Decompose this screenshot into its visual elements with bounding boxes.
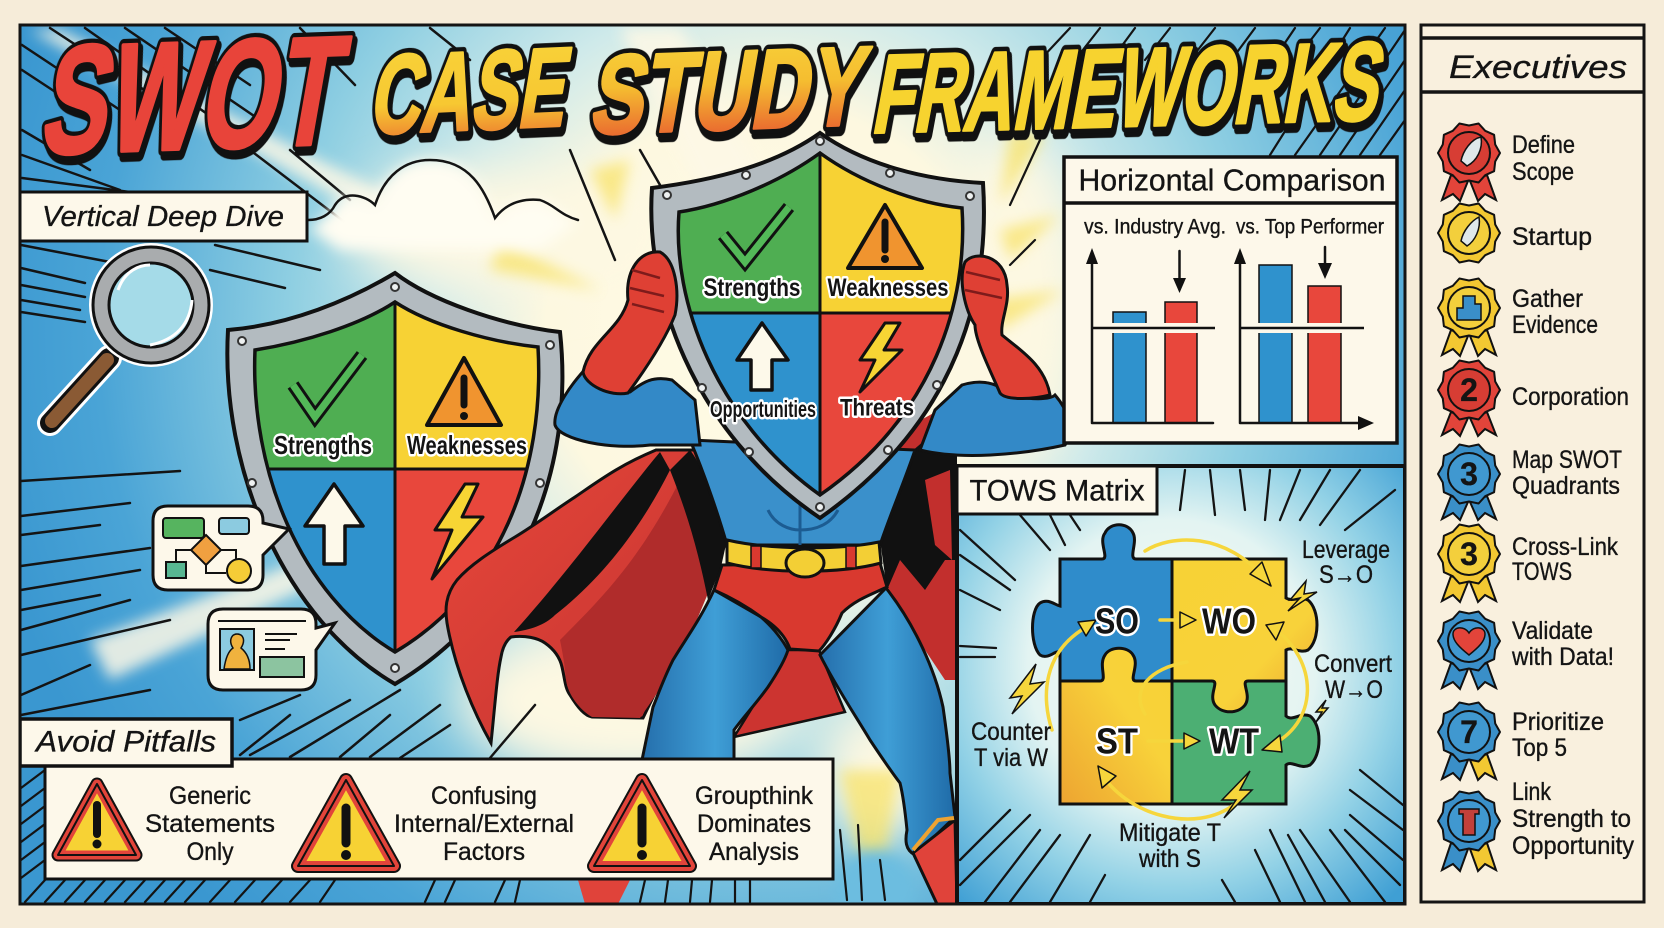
step: Define Scope xyxy=(1438,124,1575,201)
small SWOT shield xyxy=(227,273,562,684)
label: Leverage S to O: Leverage xyxy=(1302,536,1390,564)
light beams xyxy=(30,28,760,680)
step: Map SWOT Quadrants xyxy=(1438,444,1622,520)
cloud xyxy=(308,160,578,250)
label: Convert W to O xyxy=(1314,650,1392,704)
label: vs. Top Performer: vs. Top Performer xyxy=(1236,216,1384,238)
text: groupthink: Analysis xyxy=(709,838,799,866)
step: Prioritize Top 5 xyxy=(1438,702,1604,780)
icon: warning triangle xyxy=(848,205,922,268)
speech bubble: profile card xyxy=(208,609,335,690)
text: generic statements: Generic xyxy=(169,782,251,810)
trunks xyxy=(714,563,887,651)
text: confusing factors xyxy=(394,782,574,866)
left leg xyxy=(642,590,788,760)
sidebar: executive steps xyxy=(1421,25,1644,902)
step: Cross-Link TOWS: Cross-Link xyxy=(1512,533,1618,561)
quadrant labels: SO xyxy=(1095,600,1139,642)
TOWS speed lines xyxy=(960,470,1403,902)
step: Validate with Data: with Data! xyxy=(1511,643,1614,671)
puzzle: WT piece xyxy=(1172,681,1319,804)
main panel border xyxy=(20,25,1405,904)
panel: horizontal comparison xyxy=(1064,157,1397,443)
heading: Vertical Deep Dive: Vertical Deep Dive xyxy=(42,201,284,233)
label: Mitigate T with S: Mitigate T xyxy=(1119,819,1221,847)
puzzle: SO piece xyxy=(1032,525,1172,681)
step: Cross-Link TOWS: TOWS xyxy=(1512,558,1572,586)
title word: FRAMEWORKS xyxy=(866,17,1395,157)
step: Gather Evidence xyxy=(1438,278,1598,356)
text: confusing factors: Factors xyxy=(443,838,525,866)
label: Mitigate T with S xyxy=(1119,819,1221,873)
arrowheads xyxy=(1078,562,1284,788)
step: Prioritize Top 5: 7 xyxy=(1460,714,1478,750)
title xyxy=(32,3,1395,187)
heading: Vertical Deep Dive xyxy=(20,192,307,241)
puzzle: ST piece xyxy=(1060,648,1172,804)
step: Map SWOT Quadrants: 3 xyxy=(1460,456,1478,492)
label: vs. Industry Avg.: vs. Industry Avg. xyxy=(1084,216,1226,238)
bar chart: top performer xyxy=(1234,247,1374,430)
heading: Horizontal Comparison: Horizontal Comparison xyxy=(1078,162,1386,198)
icon: warning triangle xyxy=(427,358,501,425)
label: Strengths: Strengths xyxy=(274,430,372,460)
label: Counter T via W: T via W xyxy=(974,744,1048,772)
title word: SWOT xyxy=(32,3,359,187)
label: Leverage S to O xyxy=(1302,536,1390,589)
icon: up arrow xyxy=(737,323,788,390)
blue ground below hero xyxy=(840,840,908,884)
text: groupthink: Groupthink xyxy=(695,782,813,810)
title word: CASE: CASE xyxy=(364,23,580,158)
step: Map SWOT Quadrants: Map SWOT xyxy=(1512,446,1622,474)
title word: CASE: CASE xyxy=(364,23,580,158)
quadrant labels: WT xyxy=(1209,720,1259,762)
speed lines xyxy=(21,28,660,758)
text: groupthink xyxy=(695,782,813,866)
speech bubble: flowchart xyxy=(153,506,289,590)
left cape xyxy=(446,450,727,743)
right cape xyxy=(888,414,955,680)
step: Gather Evidence: Gather xyxy=(1512,285,1583,313)
text: generic statements xyxy=(145,782,275,866)
hero: body xyxy=(555,365,1070,904)
heading: Avoid Pitfalls: Avoid Pitfalls xyxy=(34,726,216,758)
step: Corporation: 2 xyxy=(1460,372,1478,408)
step: Validate with Data xyxy=(1438,612,1614,689)
step: Prioritize Top 5: Top 5 xyxy=(1512,734,1567,762)
torso xyxy=(690,440,915,545)
puzzle: WO piece xyxy=(1172,559,1317,712)
step: Link Strength to Opportunity: Opportunity xyxy=(1512,832,1634,860)
quadrant labels: ST xyxy=(1096,720,1138,762)
icon: check mark xyxy=(293,355,362,417)
title word: STUDY: STUDY xyxy=(584,22,878,158)
text: generic statements: Statements xyxy=(145,810,275,838)
label: Weaknesses: Weaknesses xyxy=(407,430,527,460)
step: Corporation xyxy=(1438,360,1629,436)
title word: SWOT: SWOT xyxy=(32,3,359,187)
quadrant labels: WO xyxy=(1202,600,1256,642)
label: Mitigate T with S: with S xyxy=(1138,845,1201,873)
icon: warning 1 xyxy=(58,784,136,855)
bar chart: industry xyxy=(1086,248,1215,423)
hero: gloves xyxy=(583,252,1050,399)
panel: TOWS matrix xyxy=(957,466,1405,904)
label: Threats: Threats xyxy=(840,394,914,422)
step: Define Scope: Define xyxy=(1512,131,1575,159)
center cape xyxy=(734,650,845,737)
glow arrows xyxy=(1046,540,1307,819)
text: confusing factors: Confusing xyxy=(431,782,537,810)
step: Link Strength to Opportunity: Link xyxy=(1512,778,1551,806)
icon: up arrow xyxy=(305,484,363,564)
step: Startup: Startup xyxy=(1512,223,1592,251)
title word: SWOT: SWOT xyxy=(32,3,359,187)
left arm xyxy=(555,365,700,446)
panel: avoid pitfalls xyxy=(20,719,833,879)
step: Cross-Link TOWS xyxy=(1438,524,1618,602)
label: Opportunities: Opportunities xyxy=(710,396,816,422)
heading: TOWS Matrix xyxy=(957,466,1157,514)
step: Link Strength to Opportunity: Strength to xyxy=(1512,805,1631,833)
step: Validate with Data: Validate xyxy=(1512,617,1593,645)
right arm xyxy=(920,382,1070,455)
step: Link Strength to Opportunity xyxy=(1438,778,1634,871)
boot xyxy=(913,820,957,904)
right leg xyxy=(820,588,955,855)
icon: check mark xyxy=(723,207,789,262)
magnifying glass xyxy=(50,243,213,423)
icon: lightning bolt xyxy=(860,323,902,392)
step: Map SWOT Quadrants: Quadrants xyxy=(1512,472,1620,500)
hero: cape xyxy=(446,400,957,904)
step: Define Scope: Scope xyxy=(1512,158,1574,186)
icon: warning 2 xyxy=(298,780,394,866)
step: Prioritize Top 5: Prioritize xyxy=(1512,708,1604,736)
cream glow xyxy=(350,140,1080,840)
label: Convert W to O: W→O xyxy=(1325,676,1383,704)
heading: TOWS Matrix: TOWS Matrix xyxy=(970,474,1144,508)
belt buckle xyxy=(786,549,824,577)
heading: Avoid Pitfalls xyxy=(20,719,232,766)
text: groupthink: Dominates xyxy=(697,810,811,838)
title word: CASE xyxy=(364,23,580,158)
yellow burst xyxy=(490,130,1064,860)
label: Counter T via W: Counter xyxy=(971,718,1051,746)
belt xyxy=(727,540,881,571)
large SWOT shield xyxy=(651,133,984,518)
label: Convert W to O: Convert xyxy=(1314,650,1392,678)
text: confusing factors: Internal/External xyxy=(394,810,574,838)
quadrant labels xyxy=(1095,600,1259,762)
step: Corporation: Corporation xyxy=(1512,383,1629,411)
label: Leverage S to O: S→O xyxy=(1319,561,1373,589)
heading: Executives: Executives xyxy=(1449,49,1627,85)
text: generic statements: Only xyxy=(186,838,234,866)
lightning bolts xyxy=(1010,581,1328,818)
icon: warning 3 xyxy=(594,780,690,866)
step: Cross-Link TOWS: 3 xyxy=(1460,536,1478,572)
label: Strengths: Strengths xyxy=(704,274,800,302)
label: Counter T via W xyxy=(971,718,1051,772)
step: Startup xyxy=(1438,204,1592,262)
icon: lightning bolt xyxy=(432,484,483,579)
step: Gather Evidence: Evidence xyxy=(1512,311,1598,339)
sky background xyxy=(20,25,1405,904)
label: Weaknesses: Weaknesses xyxy=(828,274,948,302)
title word: STUDY: STUDY xyxy=(584,22,878,158)
